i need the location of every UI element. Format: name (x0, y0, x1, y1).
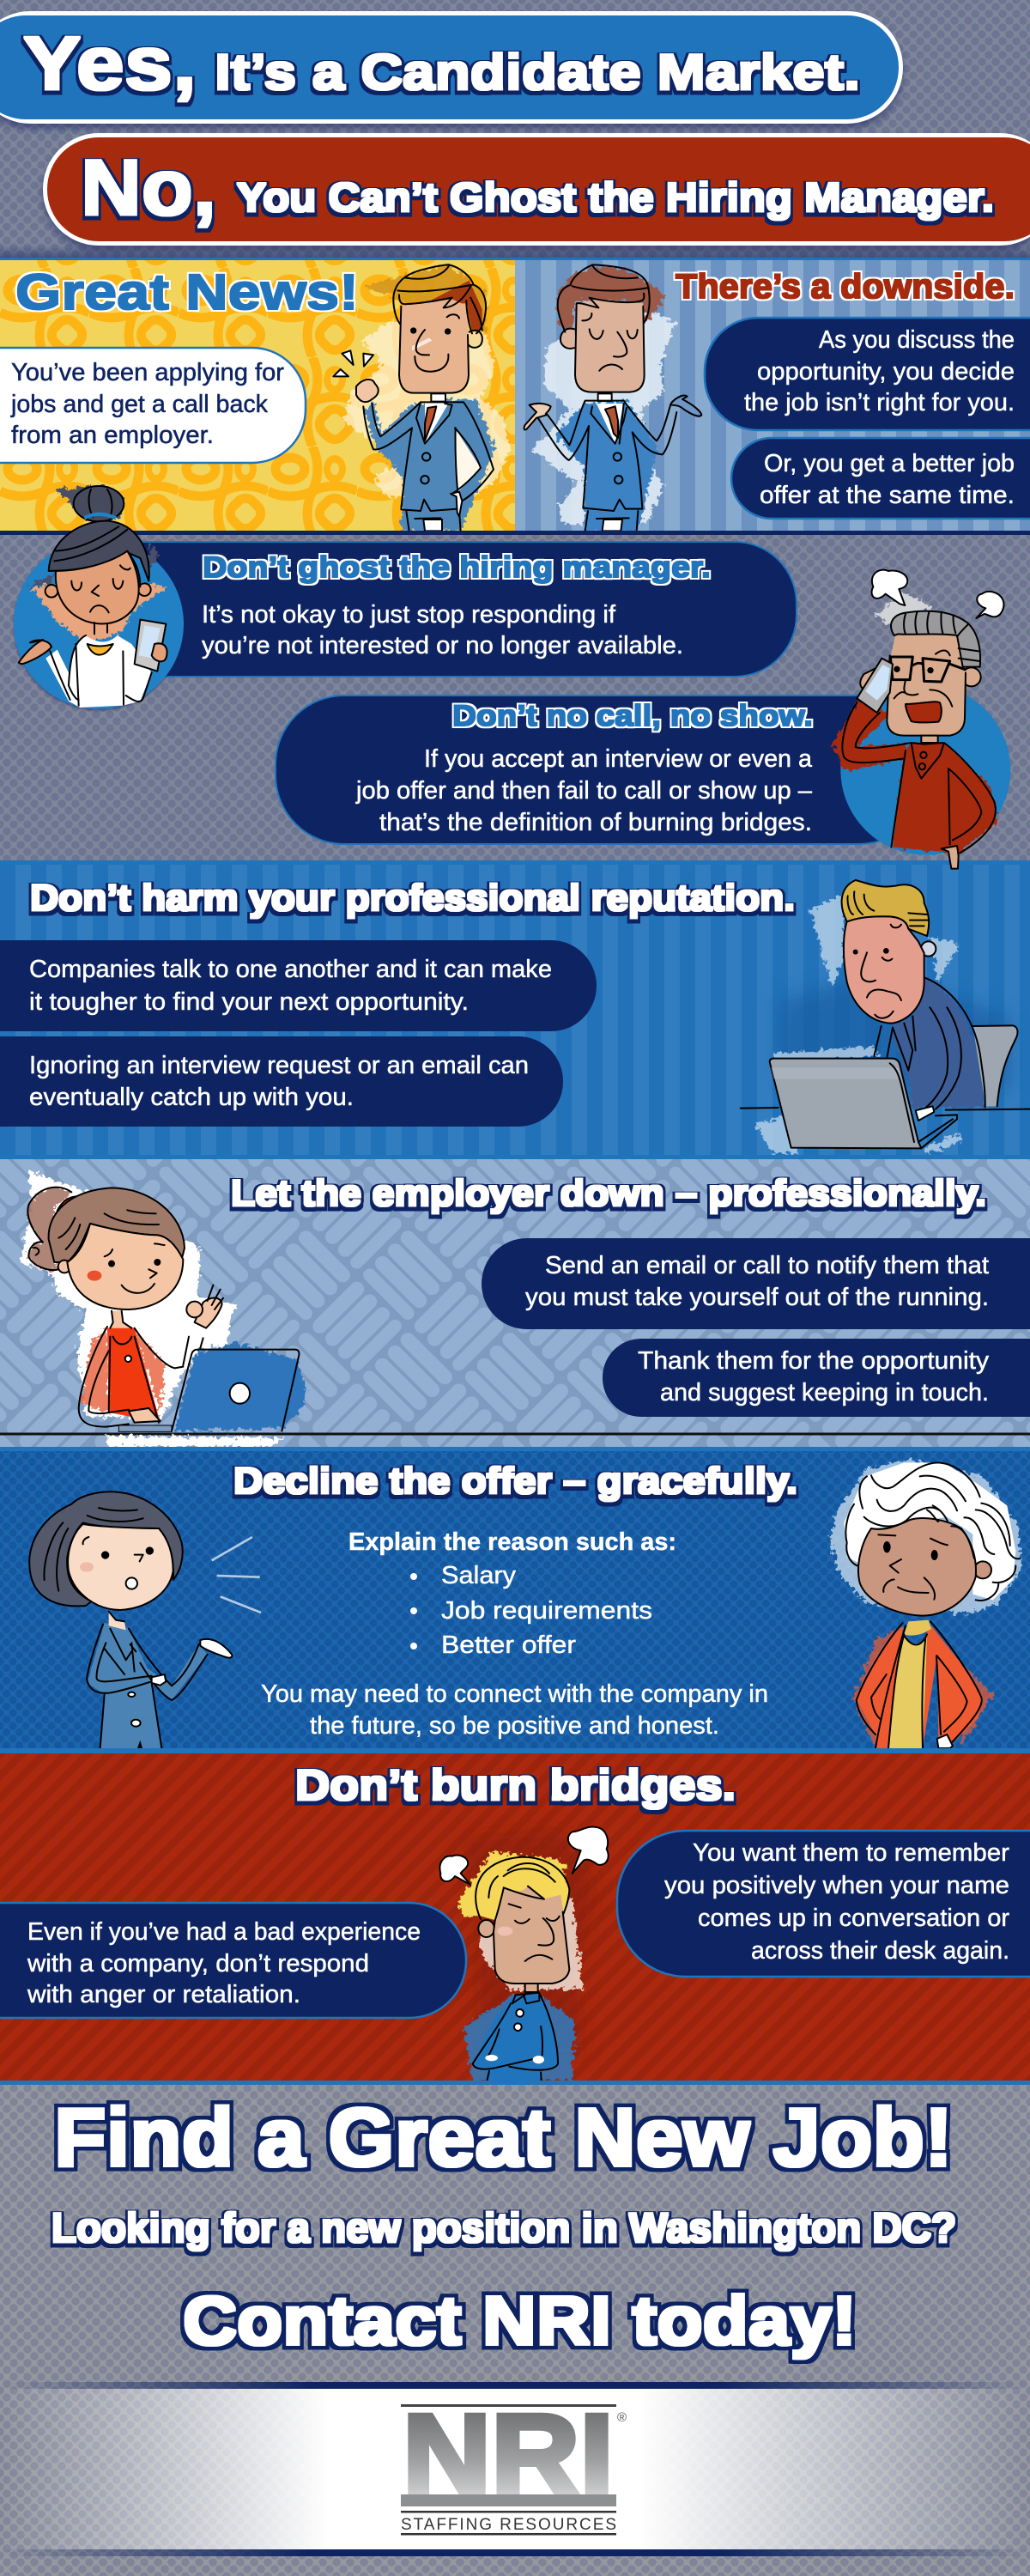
heading: no call no show: Don’t no call, no show. (452, 700, 813, 732)
callout: job not right (705, 318, 1030, 430)
panel: professional reputation (0, 860, 1030, 1159)
heading: no: No, (81, 144, 216, 232)
callout: applying for jobs (0, 348, 306, 463)
callout: remember you positively: across their desk again. (751, 1937, 1009, 1965)
callout: companies talk (0, 940, 597, 1031)
panel: don't burn bridges (0, 1753, 1030, 2085)
panel: great news (0, 264, 1030, 519)
callout: bad experience: with anger or retaliation. (27, 1981, 300, 2008)
text: be positive: the future, so be positive and honest. (310, 1712, 719, 1740)
banner: yes (0, 11, 903, 129)
panel: let the employer down (0, 1159, 1030, 1451)
heading: reputation: Don’t harm your professional reputation. (30, 878, 795, 919)
callout: better offer: Or, you get a better job (764, 450, 1015, 477)
callout: ignoring a request (0, 1036, 563, 1127)
callout: job not right: the job isn’t right for you. (744, 389, 1015, 416)
text: be positive: You may need to connect with the company in (261, 1680, 768, 1708)
character: man with crossed arms (439, 1827, 609, 2081)
call to action: find a job: Find a Great New Job! (54, 2092, 953, 2184)
panel: decline the offer (0, 1451, 1030, 1753)
callout: better offer: offer at the same time. (760, 482, 1015, 509)
character: woman at laptop (20, 1170, 306, 1447)
heading: yes: Yes, (23, 21, 197, 106)
character: woman with bob (29, 1492, 261, 1748)
callout: no call no show: job offer and then fail to call or show up – (355, 777, 813, 805)
list: reasons: Salary (441, 1562, 517, 1589)
character: happy man (333, 264, 509, 531)
callout: no call no show: that’s the definition of burning bridges. (379, 809, 812, 836)
call to action: washington dc: Looking for a new position in Washington DC? (52, 2206, 956, 2251)
character: sad man shrugging (524, 264, 701, 531)
character: woman with phone (14, 485, 184, 711)
callout: don't ghost: you’re not interested or no longer available. (202, 632, 683, 659)
callout: send an email: Send an email or call to notify them that (545, 1252, 989, 1279)
callout: job not right: opportunity, you decide (757, 358, 1015, 386)
heading: don't ghost: Don’t ghost the hiring manager. (203, 551, 711, 584)
character: angry man on phone (833, 570, 1010, 869)
banner: no (43, 133, 1030, 251)
heading: downside: There’s a downside. (676, 268, 1015, 306)
heading: great news: Great News! (15, 264, 359, 320)
callout: no call no show (276, 696, 928, 844)
heading: decline: Decline the offer – gracefully. (233, 1461, 797, 1502)
list: reasons: Better offer (441, 1631, 576, 1659)
callout: applying for jobs: You’ve been applying for (11, 359, 284, 386)
callout: ignoring a request: Ignoring an interview request or an email can (29, 1052, 529, 1079)
callout: bad experience: with a company, don’t respond (27, 1950, 369, 1978)
callout: remember you positively (617, 1831, 1030, 1977)
callout: thank them: Thank them for the opportunity (638, 1347, 990, 1375)
logo: NRI staffing resources: NRI (403, 2391, 614, 2519)
callout: remember you positively: comes up in conversation or (698, 1905, 1009, 1932)
callout: no call no show: If you accept an interview or even a (424, 745, 813, 773)
heading: don't burn bridges: Don’t burn bridges. (295, 1761, 736, 1809)
logo: NRI staffing resources: STAFFING RESOURCES (401, 2516, 616, 2534)
callout: applying for jobs: jobs and get a call back (10, 391, 268, 418)
callout: applying for jobs: from an employer. (11, 422, 214, 449)
list: reasons (410, 1562, 652, 1659)
list: reasons: Job requirements (441, 1597, 652, 1625)
footer band (0, 2382, 1030, 2556)
heading: candidate market: It’s a Candidate Market. (215, 45, 860, 100)
callout: remember you positively: You want them to remember (693, 1839, 1009, 1867)
heading: ghost the hiring manager: You Can’t Ghost the Hiring Manager. (237, 174, 994, 220)
callout: companies talk: it tougher to find your next opportunity. (29, 988, 469, 1016)
text: explain the reason: Explain the reason such as: (348, 1528, 676, 1556)
callout: thank them (603, 1339, 1030, 1417)
divider bar (0, 531, 1030, 535)
callout: better offer (731, 438, 1030, 519)
callout: don't ghost (52, 542, 797, 677)
callout: job not right: As you discuss the (819, 326, 1015, 354)
logo: NRI staffing resources: ® (617, 2410, 627, 2425)
character: man at laptop (741, 880, 1030, 1153)
callout: don't ghost: It’s not okay to just stop responding if (202, 601, 616, 629)
callout: remember you positively: you positively when your name (664, 1872, 1009, 1899)
heading: let employer down: Let the employer down – professionally. (231, 1173, 986, 1214)
character: older woman (830, 1460, 1021, 1748)
panel: great news background (0, 245, 1030, 531)
text: be positive (261, 1680, 768, 1740)
callout: bad experience: Even if you’ve had a bad experience (27, 1918, 421, 1946)
callout: bad experience (0, 1903, 466, 2018)
callout: send an email (482, 1238, 1030, 1329)
callout: companies talk: Companies talk to one another and it can make (29, 956, 552, 983)
callout: send an email: you must take yourself out of the running. (525, 1284, 989, 1311)
callout: ignoring a request: eventually catch up with you. (29, 1084, 354, 1111)
callout: thank them: and suggest keeping in touch. (660, 1379, 989, 1406)
call to action: contact nri: Contact NRI today! (183, 2282, 857, 2359)
